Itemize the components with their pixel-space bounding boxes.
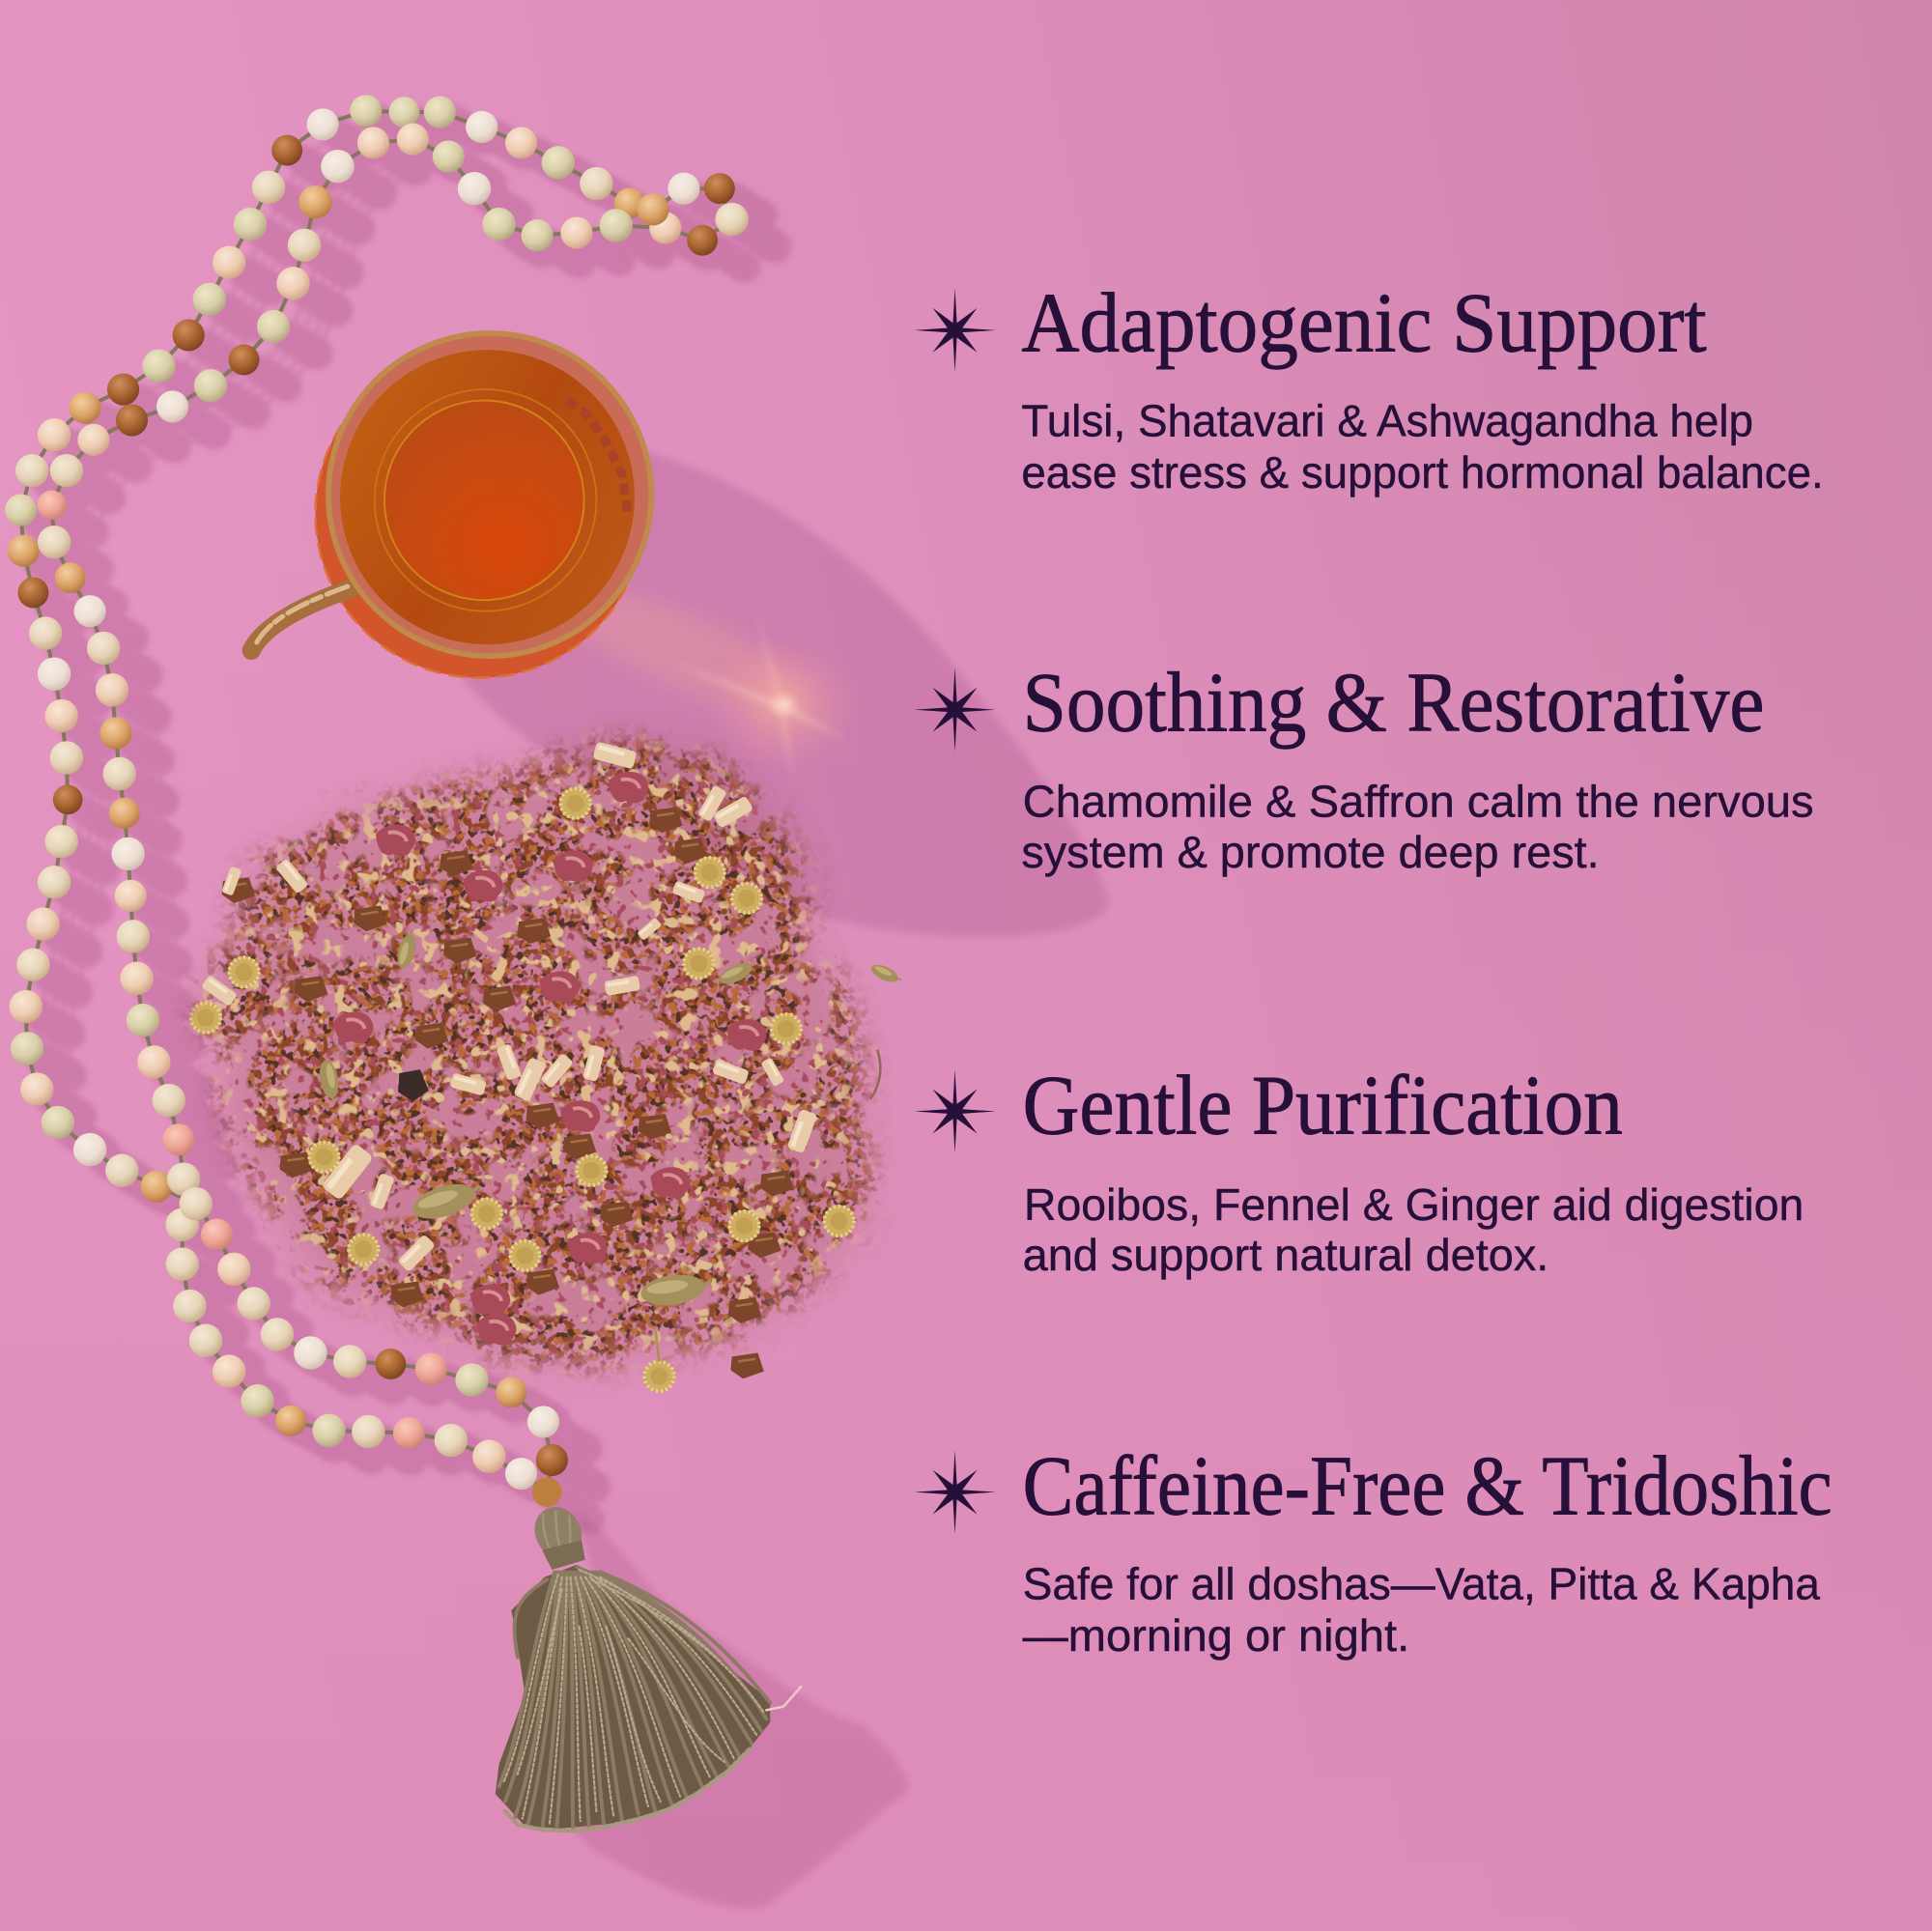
cardamom pods (317, 928, 903, 1309)
description: ease stress & support hormonal balance. (1021, 447, 1824, 497)
description: Tulsi, Shatavari & Ashwagandha help (1021, 396, 1753, 446)
description: system & promote deep rest. (1021, 827, 1600, 877)
benefit 4 (914, 1440, 1833, 1661)
loose herb tea blend (189, 741, 903, 1392)
description: Safe for all doshas—Vata, Pitta & Kapha (1023, 1559, 1820, 1609)
description: Chamomile & Saffron calm the nervous (1023, 777, 1814, 827)
benefit 1 (914, 277, 1824, 497)
description: —morning or night. (1023, 1610, 1409, 1661)
icon: star (914, 1069, 996, 1153)
cup handle (251, 586, 353, 650)
description: and support natural detox. (1023, 1230, 1548, 1280)
tassel fringe (496, 1565, 801, 1831)
tassel shadow (554, 1510, 909, 1909)
rose petals (334, 772, 766, 1345)
description (1023, 1179, 1804, 1280)
bead string (21, 111, 732, 1492)
beads (5, 95, 749, 1490)
chamomile flowers (189, 787, 880, 1392)
prayer mala beads (5, 95, 749, 1507)
icon: star (914, 667, 996, 752)
icon: star (914, 1450, 996, 1534)
tassel (496, 1507, 801, 1831)
fluted glass body (316, 350, 643, 678)
description (1021, 396, 1824, 497)
description (1021, 777, 1814, 877)
tea cup (251, 333, 651, 678)
heading: Adaptogenic Support (1021, 277, 1707, 371)
tea liquid (340, 350, 635, 644)
cup shadow and light flare (462, 450, 1109, 937)
gold guru bead (532, 1477, 562, 1507)
tea surface (384, 401, 584, 600)
tassel cap (535, 1507, 585, 1570)
description (1023, 1559, 1820, 1661)
heading: Gentle Purification (1023, 1059, 1623, 1152)
glass and rim (328, 333, 651, 656)
ginger and root pieces (201, 741, 817, 1272)
heading: Soothing & Restorative (1023, 656, 1765, 750)
description: Rooibos, Fennel & Ginger aid digestion (1024, 1179, 1804, 1230)
benefit 2 (914, 656, 1814, 877)
benefit 3 (914, 1059, 1804, 1280)
brown bark chunks (222, 807, 793, 1378)
icon: star (914, 288, 996, 372)
heading: Caffeine-Free & Tridoshic (1023, 1440, 1833, 1534)
